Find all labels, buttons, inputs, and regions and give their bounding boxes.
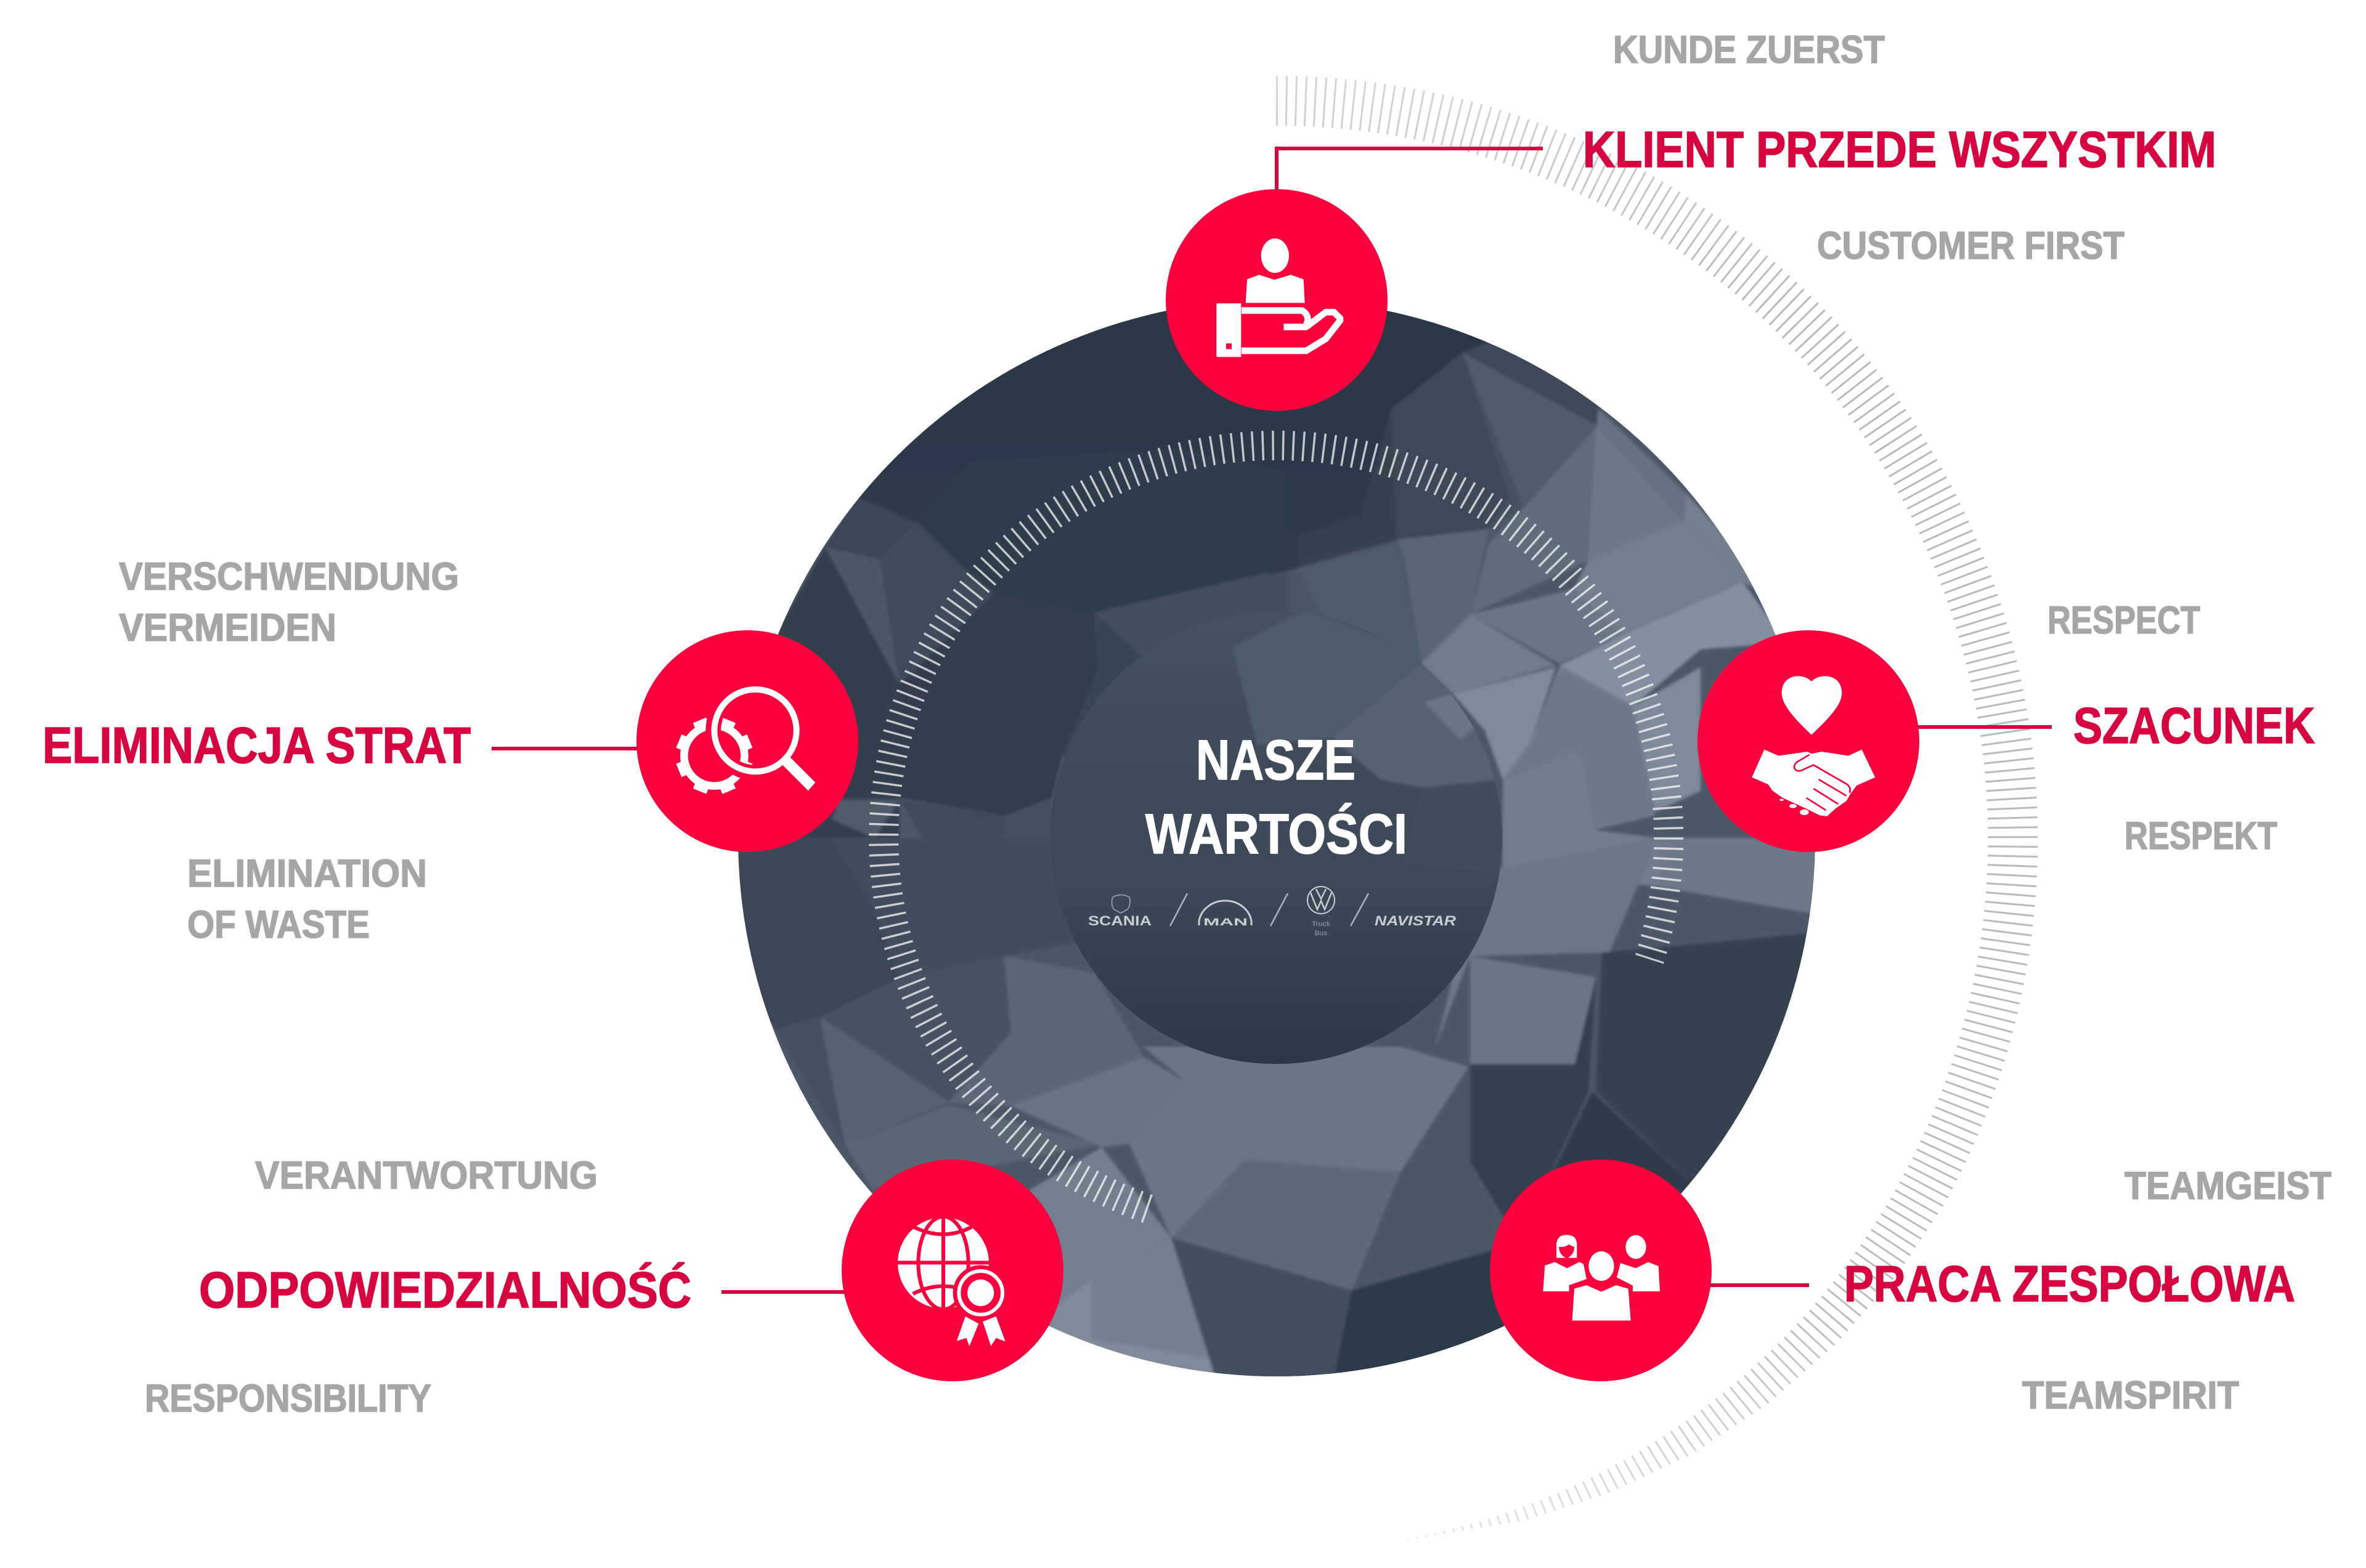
label: Teamspirit: TEAMSPIRIT	[2022, 1374, 2239, 1417]
label: Responsibility: RESPONSIBILITY	[145, 1377, 431, 1420]
polygon disc	[738, 311, 1815, 1376]
label: Verschwendung vermeiden: VERMEIDEN	[119, 606, 336, 649]
label: Respect: RESPECT	[2047, 599, 2200, 642]
label: Respekt: RESPEKT	[2124, 814, 2277, 858]
label: Szacunek: SZACUNEK	[2073, 697, 2315, 754]
logo: MAN: MAN	[1203, 916, 1248, 928]
label group: elimination of waste	[43, 555, 471, 946]
title: WARTOŚCI	[1145, 802, 1407, 866]
connector lines	[492, 148, 2052, 1292]
label group: teamwork	[1844, 1164, 2331, 1417]
logo: MAN	[1199, 901, 1251, 928]
logo: Volkswagen	[1307, 887, 1335, 937]
brand logos	[1088, 887, 1456, 937]
logo: Volkswagen: Bus	[1315, 930, 1327, 937]
label: Teamgeist: TEAMGEIST	[2124, 1164, 2331, 1208]
outer tick arc	[1276, 101, 2013, 1565]
node: responsibility	[842, 1160, 1063, 1381]
node: elimination of waste	[636, 630, 858, 852]
label: Odpowiedzialność: ODPOWIEDZIALNOŚĆ	[199, 1261, 691, 1318]
logo dividers	[1170, 893, 1368, 926]
label: Verschwendung vermeiden: VERSCHWENDUNG	[119, 555, 459, 598]
logo: Navistar: NAVISTAR	[1375, 913, 1456, 928]
logo: Volkswagen: Truck	[1312, 920, 1331, 928]
icon: heart and handshake	[1752, 676, 1875, 816]
icon: person on open hand	[1216, 238, 1340, 357]
label group: customer first	[1583, 28, 2216, 267]
label: Praca zespołowa: PRACA ZESPOŁOWA	[1844, 1255, 2295, 1312]
label: Verantwortung: VERANTWORTUNG	[255, 1154, 598, 1197]
centre hub circle	[1047, 610, 1510, 1066]
icon: three people	[1543, 1235, 1660, 1320]
label: Eliminacja strat: ELIMINACJA STRAT	[43, 717, 471, 774]
title	[1145, 729, 1407, 866]
icon: globe with rosette	[896, 1216, 1009, 1346]
title: NASZE	[1196, 729, 1356, 792]
logo: Scania: SCANIA	[1088, 913, 1152, 928]
label: Verschwendung vermeiden	[119, 555, 459, 649]
node: respect	[1697, 630, 1919, 852]
label: Elimination of waste	[187, 852, 427, 946]
icon: gear and magnifier	[676, 681, 815, 794]
label: Klient przede wszystkim: KLIENT PRZEDE WSZYSTKIM	[1583, 121, 2216, 178]
label group: responsibility	[145, 1154, 691, 1420]
logo: Scania	[1088, 895, 1152, 928]
label group: respect	[2047, 599, 2315, 858]
node: customer first	[1166, 189, 1388, 411]
label: Elimination of waste: ELIMINATION	[187, 852, 427, 895]
inner tick arc	[884, 445, 1669, 1209]
label: Elimination of waste: OF WASTE	[187, 903, 370, 946]
label: Kunde zuerst: KUNDE ZUERST	[1613, 28, 1885, 71]
label: Customer first: CUSTOMER FIRST	[1817, 224, 2124, 267]
node: teamwork	[1490, 1160, 1712, 1381]
